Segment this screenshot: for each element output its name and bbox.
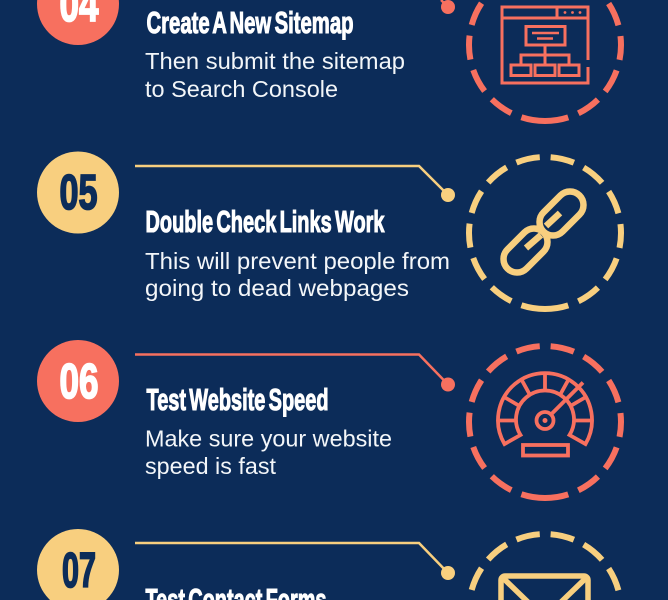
body text 06 (145, 426, 392, 479)
number badge 07: 07 (62, 544, 96, 598)
body text 06: speed is fast (145, 453, 276, 479)
number badge 04 (37, 0, 119, 45)
number badge 07 (37, 529, 119, 600)
connector dot 04 (441, 0, 455, 14)
heading 05: Double Check Links Work (146, 204, 385, 239)
dashed ring 07 (469, 534, 621, 600)
icon: chain link (498, 186, 589, 278)
body text 05: This will prevent people from (145, 248, 450, 274)
number badge 05: 05 (60, 166, 98, 220)
number badge 06: 06 (60, 355, 98, 409)
body text 04 (145, 48, 405, 102)
panel: step 07 test contact forms (37, 529, 621, 600)
icon: envelope (501, 576, 588, 600)
body text 06: Make sure your website (145, 426, 392, 452)
connector line 05 (135, 166, 455, 202)
panel: step 06 test website speed (37, 340, 621, 498)
icon: sitemap browser window (502, 7, 588, 83)
panel: step 04 create a new sitemap (37, 0, 621, 121)
dashed ring 04 (469, 0, 621, 121)
body text 04: to Search Console (145, 76, 338, 102)
dashed ring 05 (469, 157, 621, 309)
panel: step 05 double check links work (37, 152, 621, 309)
body text 04: Then submit the sitemap (145, 48, 405, 74)
number badge 05 (37, 152, 119, 234)
number badge 06 (37, 340, 119, 422)
body text 05: going to dead webpages (145, 275, 409, 301)
body text 05 (145, 248, 450, 301)
heading 04: Create A New Sitemap (146, 5, 354, 40)
dashed ring 06 (469, 346, 621, 498)
heading 06: Test Website Speed (146, 382, 328, 417)
connector line 07 (135, 543, 455, 580)
icon: speedometer (498, 373, 592, 456)
connector line 06 (135, 354, 455, 392)
